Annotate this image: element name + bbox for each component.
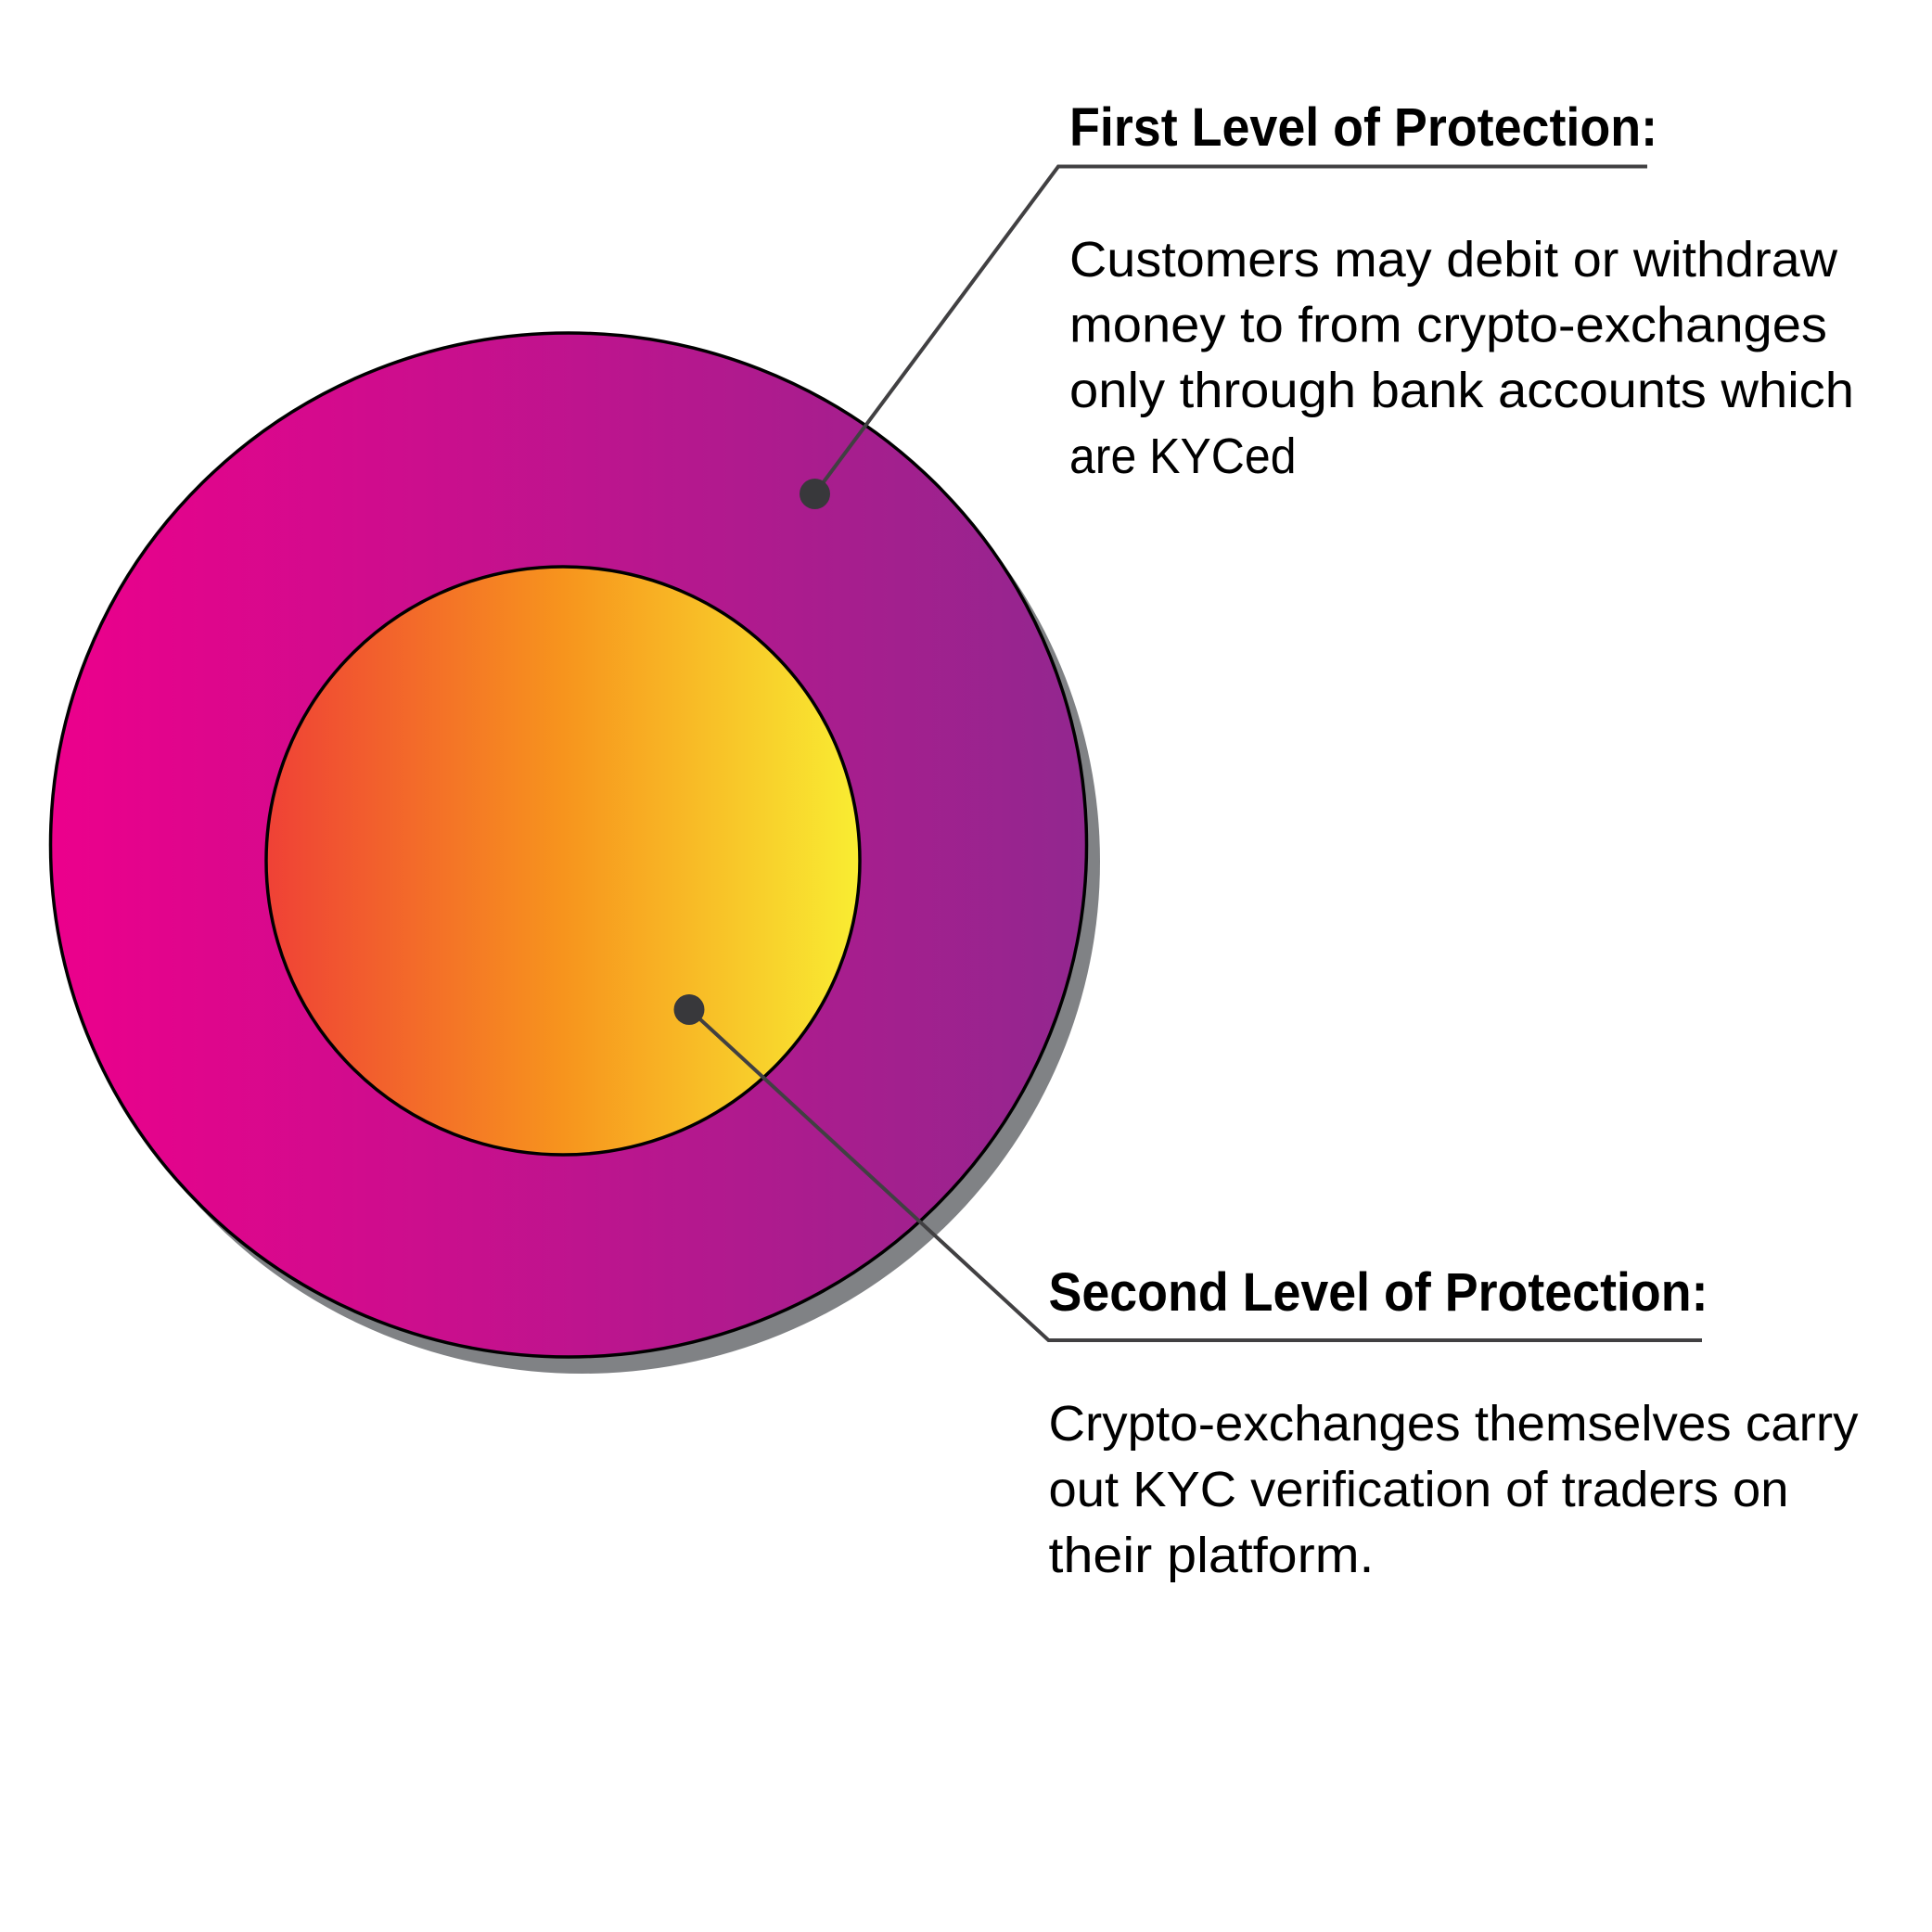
text block: first level description: only through bank accounts which [1069,363,1854,418]
callout leader: first level [800,167,1647,509]
callout leader: second level [673,994,1702,1340]
heading: second level: Second Level of Protection: [1048,1262,1708,1323]
text block: first level description: Customers may debit or withdraw [1069,232,1838,288]
leader line [689,1009,1702,1340]
text block: first level description: are KYCed [1069,429,1297,484]
text block: second level description: their platform. [1048,1528,1375,1583]
text block: first level description: money to from crypto-exchanges [1069,297,1827,352]
text block: second level description: Crypto-exchanges themselves carry [1048,1396,1859,1452]
concentric circle diagram [50,333,1100,1374]
text block: second level description: out KYC verification of traders on [1048,1462,1788,1517]
anchor dot [673,994,705,1025]
circle drop shadow [64,350,1100,1374]
heading: first level: First Level of Protection: [1069,97,1657,158]
anchor dot [800,479,830,509]
outer circle: first level [50,333,1087,1357]
text block: second level description [1048,1396,1859,1583]
inner circle: second level [266,567,860,1155]
text block: first level description [1069,232,1854,484]
leader line [814,167,1647,494]
